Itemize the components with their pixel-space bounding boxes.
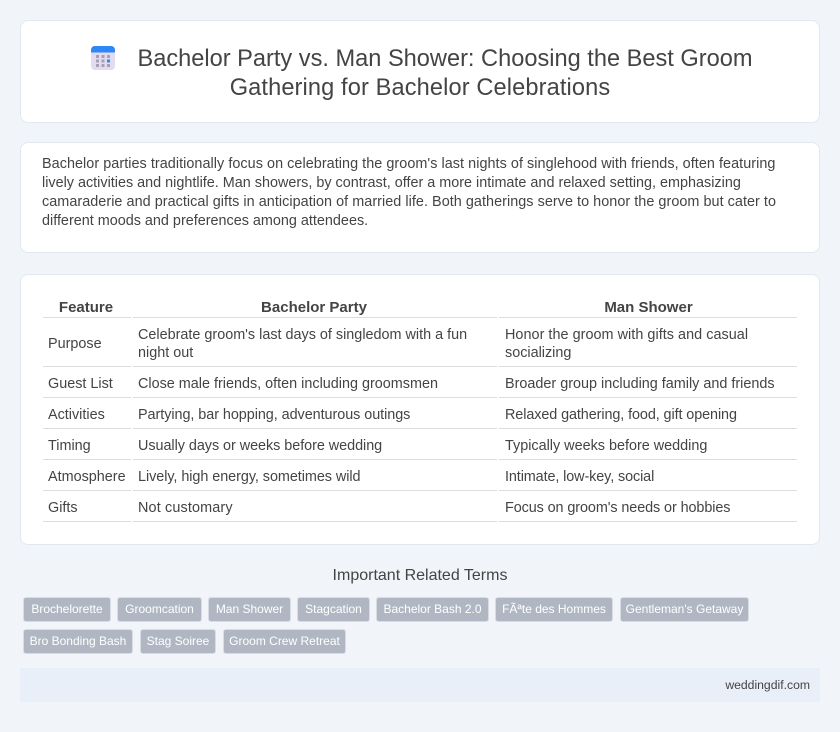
table header: Feature <box>59 299 113 316</box>
intro text: different moods and preferences among attendees. <box>42 213 368 229</box>
title: Bachelor Party vs. Man Shower: Choosing the Best Groom <box>137 46 753 72</box>
intro text: Bachelor parties traditionally focus on celebrating the groom's last nights of singlehood with friends, often featuring <box>42 156 775 172</box>
related term tags: Groom Crew Retreat <box>229 634 340 648</box>
panel: comparison table <box>20 274 820 545</box>
related term tags: Bro Bonding Bash <box>30 634 126 648</box>
related term tags: Brochelorette <box>31 602 103 616</box>
row: activities: Partying, bar hopping, adventurous outings <box>138 407 410 423</box>
row: activities: Relaxed gathering, food, gift opening <box>505 407 737 423</box>
related term tags: Man Shower <box>216 602 283 616</box>
row: atmosphere: Intimate, low-key, social <box>505 469 654 485</box>
row: guest list: Close male friends, often including groomsmen <box>138 376 438 392</box>
related term tags: Bachelor Bash 2.0 <box>383 602 482 616</box>
row: timing: Usually days or weeks before wedding <box>138 438 382 454</box>
title <box>137 46 753 100</box>
row: purpose: Honor the groom with gifts and casual <box>505 327 748 343</box>
related term tags: Groomcation <box>125 602 194 616</box>
row: purpose: night out <box>138 345 193 361</box>
related term tags: Gentleman's Getaway <box>626 602 743 616</box>
row: timing: Timing <box>48 438 91 454</box>
related term tags <box>23 597 749 654</box>
row: gifts <box>48 500 730 516</box>
row: atmosphere: Atmosphere <box>48 469 126 485</box>
table header: Bachelor Party <box>261 299 367 316</box>
table header: Man Shower <box>604 299 693 316</box>
footer bar <box>20 668 820 702</box>
intro text <box>42 156 776 229</box>
table header <box>59 299 693 316</box>
related term tags: Stag Soiree <box>147 634 209 648</box>
row: purpose <box>48 327 748 361</box>
row: timing <box>48 438 707 454</box>
row: purpose: socializing <box>505 345 571 361</box>
row: atmosphere <box>48 469 654 485</box>
row: guest list: Guest List <box>48 376 113 392</box>
row: timing: Typically weeks before wedding <box>505 438 707 454</box>
icon: calendar <box>91 46 115 70</box>
intro text: lively activities and nightlife. Man showers, by contrast, offer a more intimate and relaxed setting, emphasizing <box>42 175 741 191</box>
row: gifts: Gifts <box>48 500 78 516</box>
panel: introduction <box>20 142 820 253</box>
panel: header <box>20 20 820 123</box>
row: guest list: Broader group including family and friends <box>505 376 775 392</box>
title: Gathering for Bachelor Celebrations <box>230 74 610 100</box>
footer source text: weddingdif.com <box>725 678 810 692</box>
row: atmosphere: Lively, high energy, sometimes wild <box>138 469 360 485</box>
row: activities: Activities <box>48 407 105 423</box>
intro text: camaraderie and practical gifts in anticipation of married life. Both gatherings serve to honor the groom but cater to <box>42 194 776 210</box>
row: guest list <box>48 376 775 392</box>
related term tags: FÃªte des Hommes <box>502 602 606 616</box>
heading: related terms: Important Related Terms <box>333 566 507 584</box>
related term tags: Stagcation <box>305 602 362 616</box>
row: purpose: Celebrate groom's last days of singledom with a fun <box>138 327 467 343</box>
row: gifts: Focus on groom's needs or hobbies <box>505 500 730 516</box>
row: activities <box>48 407 737 423</box>
row: gifts: Not customary <box>138 500 233 516</box>
row: purpose: Purpose <box>48 336 102 352</box>
